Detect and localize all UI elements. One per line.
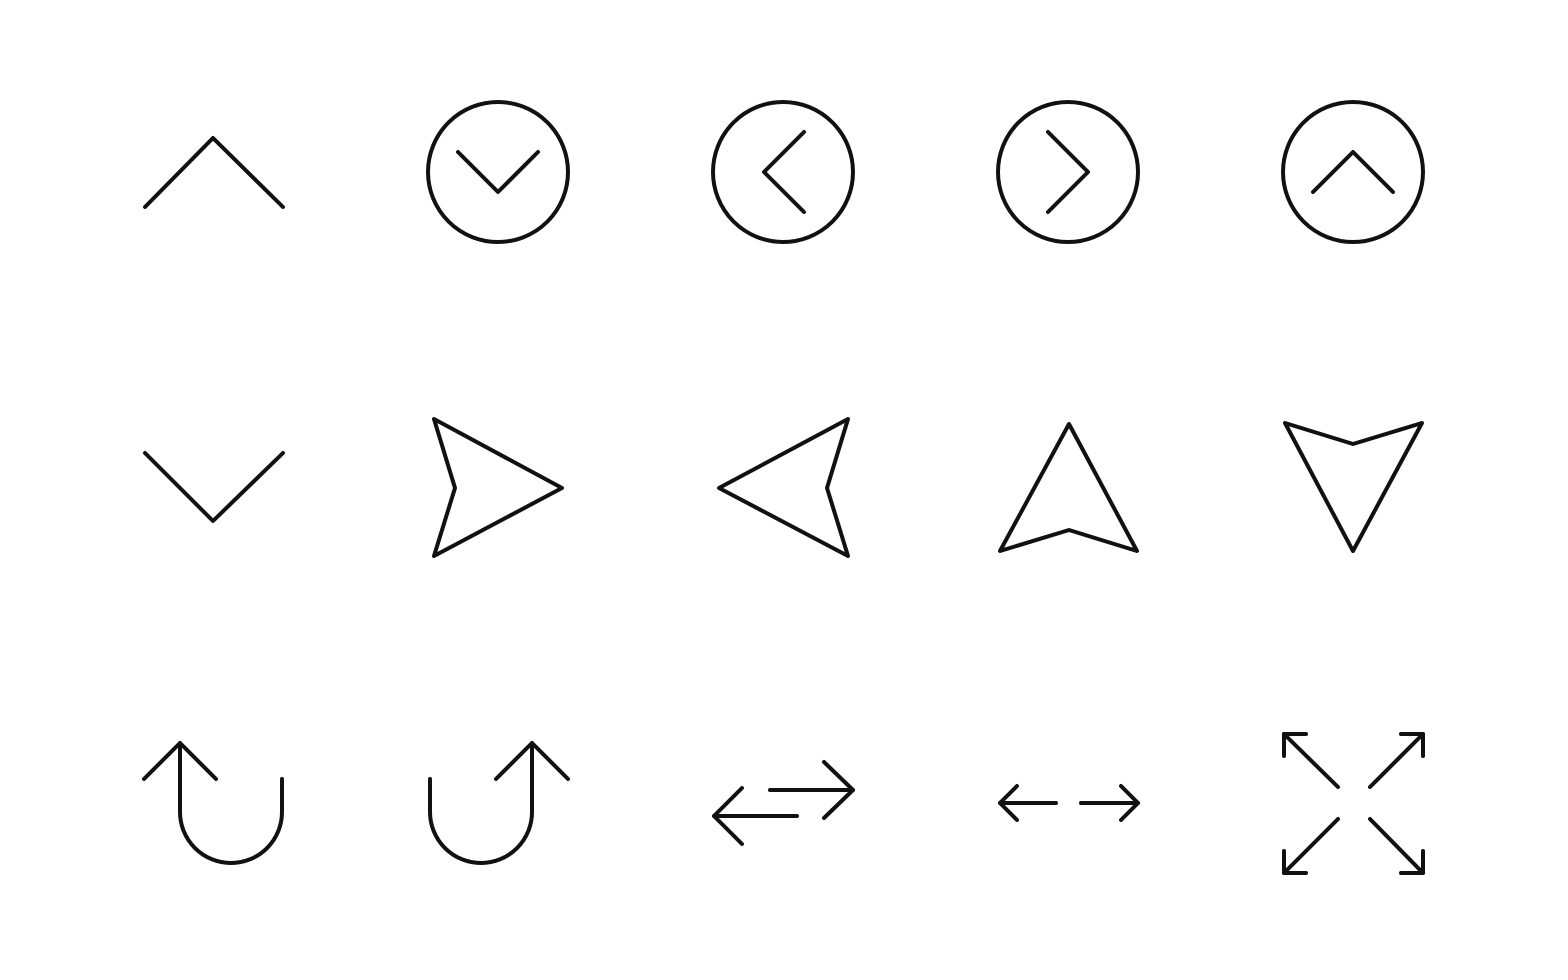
icon: navigation arrow right <box>434 419 562 556</box>
icon: circle chevron left <box>713 102 853 242</box>
icon: circle chevron right <box>998 102 1138 242</box>
icon: expand <box>1284 734 1423 873</box>
icon: chevron down <box>145 453 283 521</box>
icon: chevron up <box>145 138 283 207</box>
icon: navigation arrow down <box>1285 423 1422 551</box>
icon: left right arrows <box>1000 786 1138 820</box>
icon: u-turn right <box>430 743 568 863</box>
icon: swap arrows <box>714 762 853 844</box>
icon: circle chevron down <box>428 102 568 242</box>
icon: navigation arrow up <box>1000 424 1137 551</box>
icon: circle chevron up <box>1283 102 1423 242</box>
icon: u-turn left <box>144 743 282 863</box>
icon: navigation arrow left <box>719 419 848 556</box>
